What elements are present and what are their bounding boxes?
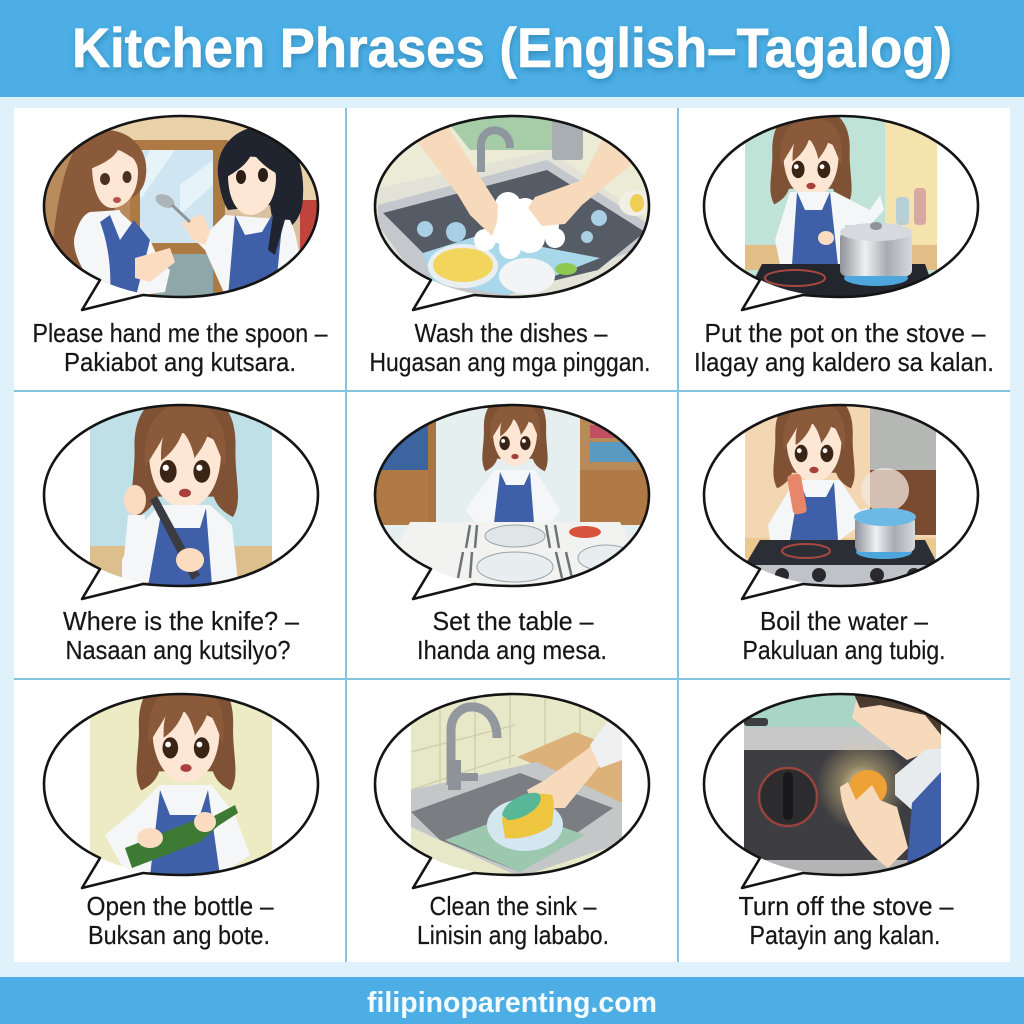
phrase text: Ilagay ang kaldero sa kalan. [694, 347, 994, 377]
phrase text: Please hand me the spoon – [32, 318, 328, 348]
phrase text: Wash the dishes – [414, 318, 608, 348]
phrase text [742, 606, 946, 665]
phrase text: Clean the sink – [430, 891, 597, 921]
speech bubble outline [44, 694, 318, 888]
phrase text: Turn off the stove – [738, 891, 954, 921]
speech bubble outline [375, 405, 649, 599]
panel: open the bottle [44, 673, 318, 950]
phrase text [32, 318, 328, 377]
phrase text: Patayin ang kalan. [750, 920, 940, 950]
illustration: hand cleaning sink with sponge [411, 690, 622, 880]
illustration: girl opening bottle [90, 695, 272, 874]
phrase text: Linisin ang lababo. [417, 920, 609, 950]
phrase text [738, 891, 954, 950]
phrase text: Where is the knife? – [63, 606, 300, 636]
phrase text [417, 891, 609, 950]
phrase text: Pakiabot ang kutsara. [64, 347, 296, 377]
phrase text [417, 606, 607, 665]
phrase text: Pakuluan ang tubig. [742, 635, 946, 665]
speech bubble outline [375, 694, 649, 888]
panel: turn off the stove [704, 690, 978, 950]
illustration: turning off stove knob [744, 690, 941, 878]
illustration: hands washing dishes in sink [376, 117, 648, 296]
phrase text: Nasaan ang kutsilyo? [66, 635, 290, 665]
panel: wash the dishes [370, 112, 655, 377]
speech bubble outline [44, 116, 318, 310]
phrase text: Hugasan ang mga pinggan. [370, 347, 650, 377]
speech bubble outline [704, 405, 978, 599]
footer website text: filipinoparenting.com [367, 987, 657, 1019]
illustration: girl with pot on stove [745, 108, 937, 302]
phrase text [370, 318, 650, 377]
panel: where is the knife [44, 391, 318, 665]
phrase text [63, 606, 300, 665]
illustration: two girls and spoon [40, 112, 322, 302]
speech bubble outline [704, 694, 978, 888]
panel: set the table [370, 394, 655, 665]
panel: put the pot on the stove [694, 108, 994, 377]
phrase text: Ihanda ang mesa. [417, 635, 607, 665]
phrase text: Open the bottle – [86, 891, 274, 921]
phrase text: Buksan ang bote. [88, 920, 270, 950]
panel: clean the sink [375, 690, 649, 950]
speech bubble outline [375, 116, 649, 310]
speech bubble outline [44, 405, 318, 599]
footer bar [0, 977, 1024, 1024]
title: Kitchen Phrases (English–Tagalog) [72, 16, 952, 79]
header bar [0, 0, 1024, 97]
illustration: girl holding knife [90, 406, 272, 585]
illustration: girl boiling water [745, 406, 936, 585]
phrase text: Set the table – [432, 606, 594, 636]
phrase text: Put the pot on the stove – [704, 318, 986, 348]
phrase text: Boil the water – [760, 606, 928, 636]
phrase text [694, 318, 994, 377]
panel: boil the water [704, 392, 978, 665]
speech bubble outline [704, 116, 978, 310]
illustration: girl setting the table [376, 406, 648, 584]
panel: please hand me the spoon [32, 112, 328, 377]
phrase text [86, 891, 274, 950]
